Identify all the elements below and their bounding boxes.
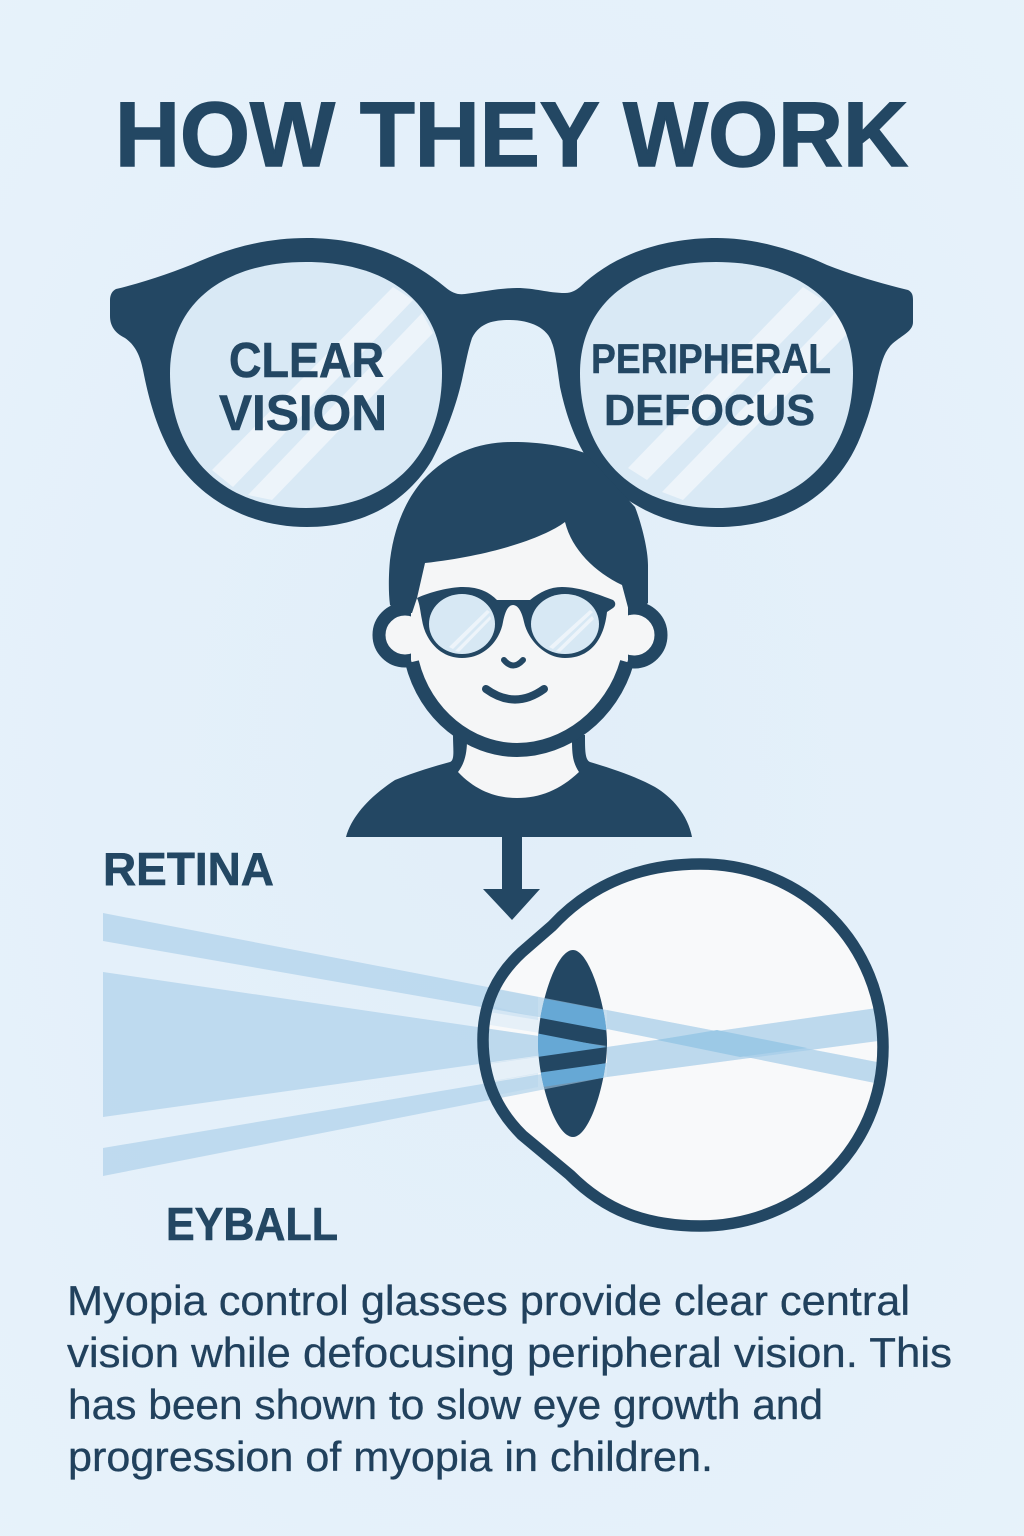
label: retina: RETINA [103,843,274,895]
label: eyeball: EYBALL [166,1198,338,1250]
left lens label: CLEAR [229,334,384,388]
shirt [346,735,692,837]
illustration: child wearing glasses [346,442,692,837]
arrow down [483,837,540,920]
left lens [170,262,442,508]
illustration: glasses [110,238,913,527]
hair [389,442,648,615]
eye lens [538,950,607,1137]
left lens label [219,334,387,441]
smile [486,689,544,700]
face [411,510,628,750]
eyeball outline [483,864,883,1226]
right lens label: PERIPHERAL [591,335,831,382]
illustration: eyeball with light rays [103,864,883,1226]
nose [504,660,523,666]
faint light inside eye between rays [484,1004,540,1082]
right lens [580,262,853,508]
description text: progression of myopia in children. [68,1433,713,1480]
title: HOW THEY WORK [115,84,908,186]
description text: vision while defocusing peripheral vision. This [67,1329,952,1376]
right lens label: DEFOCUS [604,386,815,435]
description text: has been shown to slow eye growth and [68,1381,823,1428]
small glasses [417,587,615,658]
chin outline [412,662,627,750]
light rays [103,913,878,1176]
ray crossing [657,1030,807,1057]
left lens label: VISION [219,385,387,441]
rays through lens [538,998,606,1087]
description text [67,1277,952,1480]
right ear [607,608,661,662]
description text: Myopia control glasses provide clear central [67,1277,910,1324]
right lens label [591,335,831,435]
left ear [379,609,431,661]
neck [458,740,579,798]
eyeball fill [483,864,883,1226]
rays deepened inside the eyeball [489,988,878,1095]
glasses frame [110,238,913,527]
